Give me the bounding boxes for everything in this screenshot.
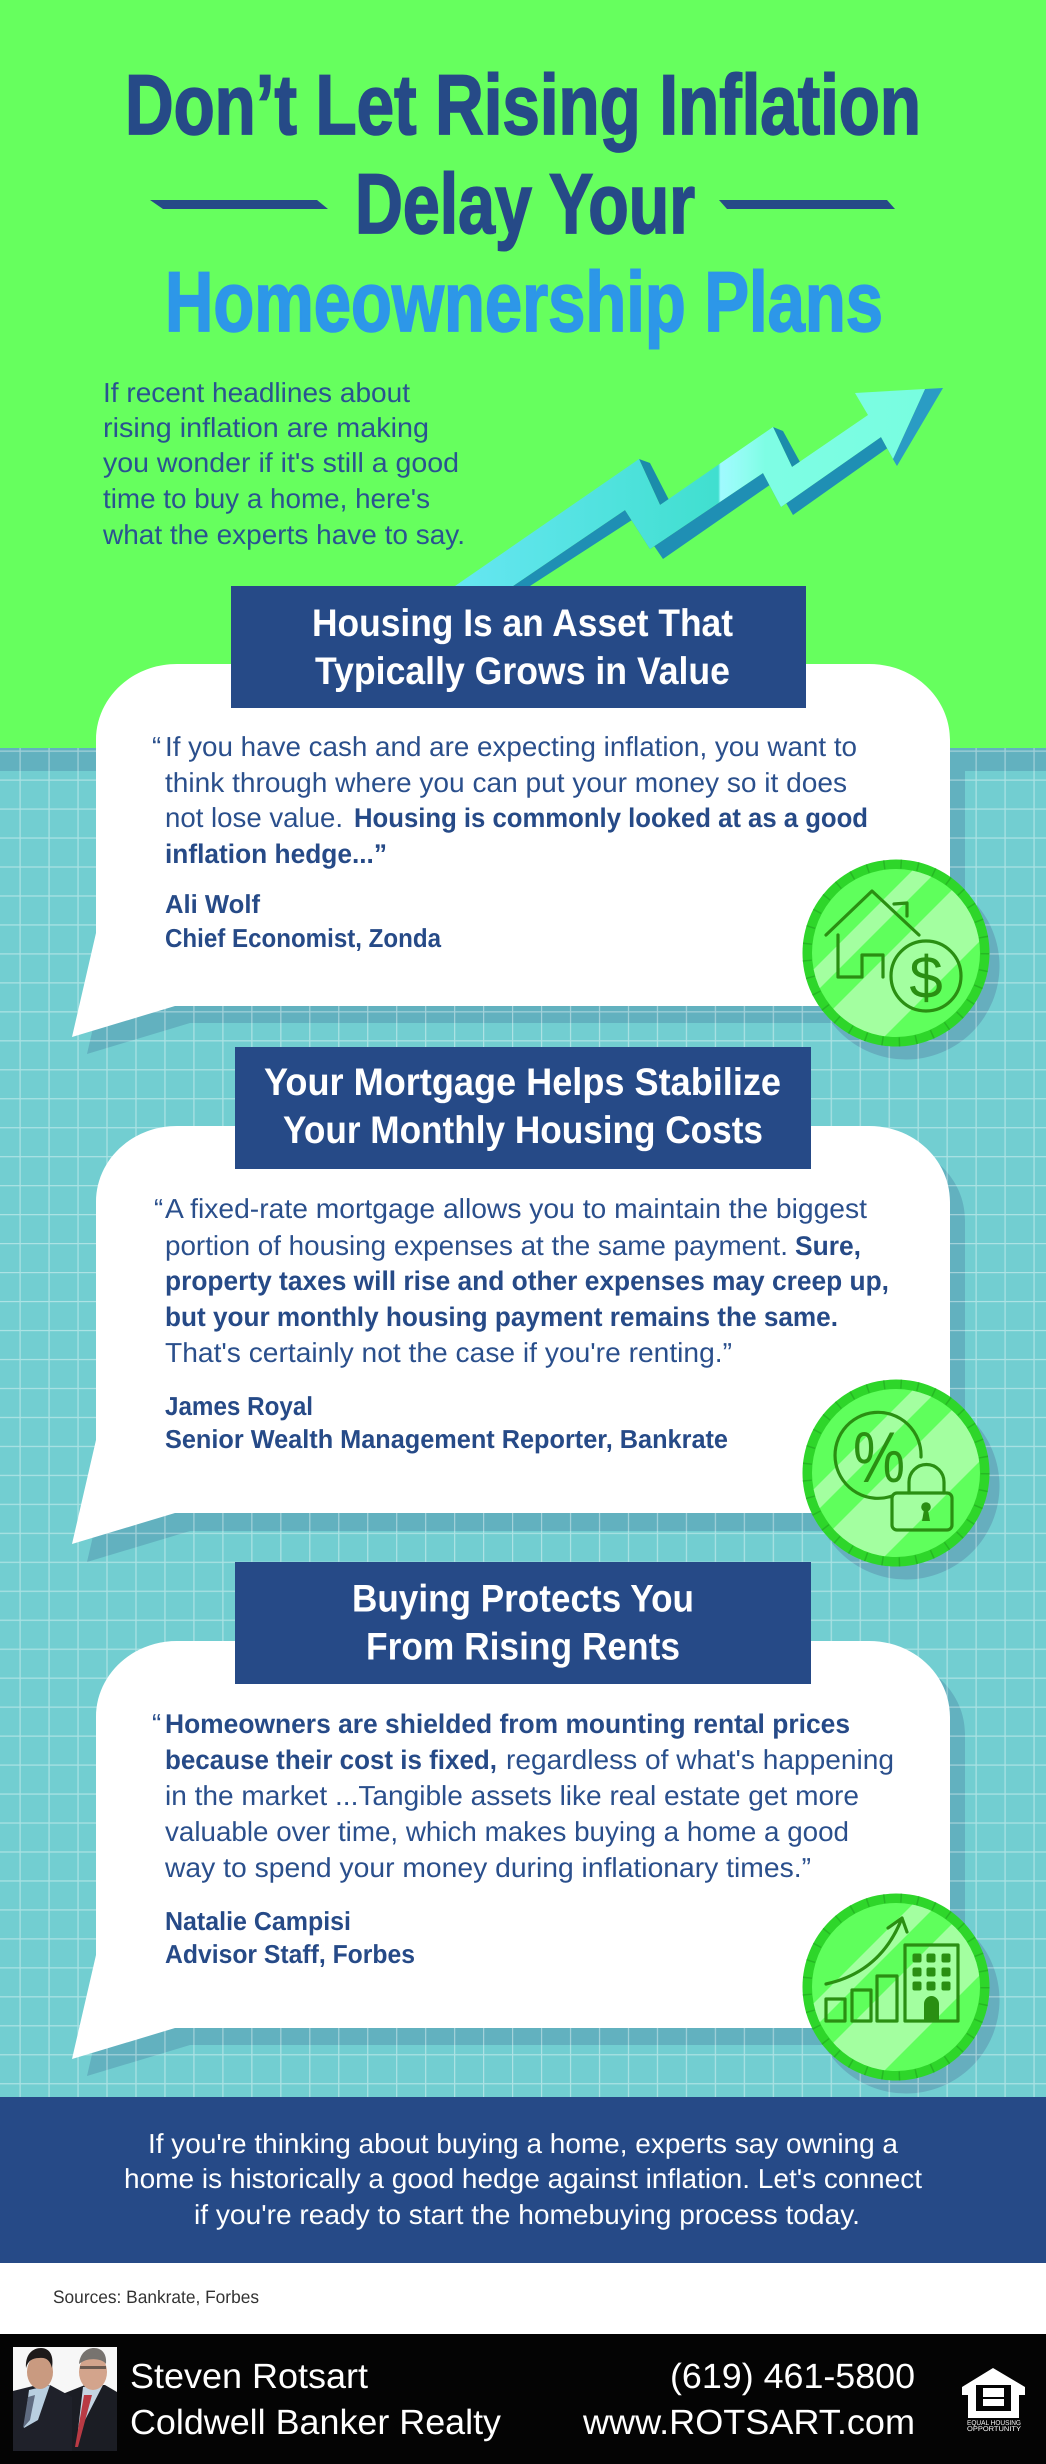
quote 1: think through where you can put your money so it does xyxy=(165,767,847,798)
icon: percent and lock xyxy=(802,1380,990,1566)
attribution 2: Senior Wealth Management Reporter, Bankrate xyxy=(165,1424,728,1454)
quote 1: If you have cash and are expecting inflation, you want to xyxy=(165,731,857,762)
speech bubble 1 xyxy=(72,664,950,1037)
banner 3: From Rising Rents xyxy=(366,1626,680,1668)
intro text: you wonder if it's still a good xyxy=(103,447,459,478)
banner 3 xyxy=(235,1562,811,1684)
right title rule xyxy=(719,200,895,209)
quote 2: property taxes will rise and other expenses may creep up, xyxy=(165,1266,889,1296)
banner 3: Buying Protects You xyxy=(352,1578,694,1620)
left title rule xyxy=(150,200,328,209)
quote 3: “ xyxy=(152,1708,161,1739)
attribution 2: James Royal xyxy=(165,1391,313,1421)
rising arrow xyxy=(455,388,943,586)
banner 1: Housing Is an Asset That xyxy=(312,602,733,645)
closing call to action: if you're ready to start the homebuying process today. xyxy=(194,2199,860,2230)
attribution 3 xyxy=(165,1906,415,1969)
quote 3: in the market ...Tangible assets like real estate get more xyxy=(165,1780,859,1811)
intro text: rising inflation are making xyxy=(103,412,429,443)
closing call to action: home is historically a good hedge against inflation. Let's connect xyxy=(124,2163,922,2194)
quote 1: Housing is commonly looked at as a good xyxy=(354,803,868,833)
title xyxy=(125,58,921,350)
agent contact: (619) 461-5800 xyxy=(670,2357,915,2396)
sources: Sources: Bankrate, Forbes xyxy=(53,2287,259,2307)
icon: house and dollar: $ xyxy=(909,944,943,1011)
speech bubble 3 xyxy=(72,1641,950,2059)
quote 1 xyxy=(152,731,868,869)
quote 3 xyxy=(152,1708,894,1883)
agent name and company: Steven Rotsart xyxy=(130,2357,368,2396)
banner 2 xyxy=(235,1047,811,1169)
quote 3: valuable over time, which makes buying a home a good xyxy=(165,1816,849,1847)
quote 1: not lose value. xyxy=(165,802,343,833)
title line 2: Delay Your xyxy=(355,157,695,252)
quote 3: Homeowners are shielded from mounting rental prices xyxy=(165,1709,850,1739)
sources xyxy=(0,2263,1046,2334)
quote 2: A fixed-rate mortgage allows you to maintain the biggest xyxy=(165,1193,867,1224)
closing call to action xyxy=(0,2097,1046,2263)
quote 3: because their cost is fixed, xyxy=(165,1745,497,1775)
quote 3: way to spend your money during inflationary times.” xyxy=(164,1852,811,1883)
banner 2: Your Monthly Housing Costs xyxy=(283,1109,763,1152)
quote 2: “ xyxy=(154,1193,163,1224)
teal grid background xyxy=(0,681,1046,2097)
icon: equal housing opportunity: EQUAL HOUSING xyxy=(967,2420,1021,2427)
banner 2: Your Mortgage Helps Stabilize xyxy=(264,1061,781,1104)
green header background xyxy=(0,0,1046,748)
icon: growth chart and building xyxy=(802,1894,990,2080)
icon: percent and lock: % xyxy=(853,1418,905,1498)
panel: housing is an asset xyxy=(72,586,990,1046)
speech bubble 2 xyxy=(72,1126,950,1544)
quote 2: Sure, xyxy=(795,1231,861,1261)
agent contact: www.ROTSART.com xyxy=(582,2403,915,2442)
attribution 2 xyxy=(165,1391,728,1454)
intro text: If recent headlines about xyxy=(103,377,410,408)
agent photo xyxy=(13,2347,117,2451)
agent footer xyxy=(0,2334,1046,2464)
quote 2: but your monthly housing payment remains the same. xyxy=(165,1302,838,1332)
banner 1: Typically Grows in Value xyxy=(315,650,730,693)
quote 3: regardless of what's happening xyxy=(506,1744,894,1775)
intro text xyxy=(102,377,465,550)
attribution 1: Chief Economist, Zonda xyxy=(165,923,441,953)
agent name and company: Coldwell Banker Realty xyxy=(130,2403,502,2442)
quote 2: That's certainly not the case if you're renting.” xyxy=(165,1337,732,1368)
icon: equal housing opportunity: OPPORTUNITY xyxy=(967,2426,1021,2433)
quote 1: “ xyxy=(152,731,161,762)
attribution 3: Natalie Campisi xyxy=(165,1906,351,1936)
attribution 1 xyxy=(165,889,441,953)
banner 1 xyxy=(231,586,806,708)
intro text: time to buy a home, here's xyxy=(103,483,430,514)
panel: mortgage stabilizes costs xyxy=(72,1047,990,1566)
panel: buying protects from rents xyxy=(72,1562,990,2080)
intro text: what the experts have to say. xyxy=(102,519,465,550)
agent name and company xyxy=(130,2357,502,2442)
closing call to action: If you're thinking about buying a home, experts say owning a xyxy=(148,2128,899,2159)
quote 2 xyxy=(154,1193,889,1368)
icon: house and dollar xyxy=(802,860,990,1046)
attribution 3: Advisor Staff, Forbes xyxy=(165,1939,415,1969)
icon: equal housing opportunity xyxy=(962,2368,1025,2433)
attribution 1: Ali Wolf xyxy=(165,889,260,919)
agent contact xyxy=(582,2357,915,2442)
quote 2: portion of housing expenses at the same payment. xyxy=(165,1230,788,1261)
quote 1: inflation hedge...” xyxy=(165,839,387,869)
